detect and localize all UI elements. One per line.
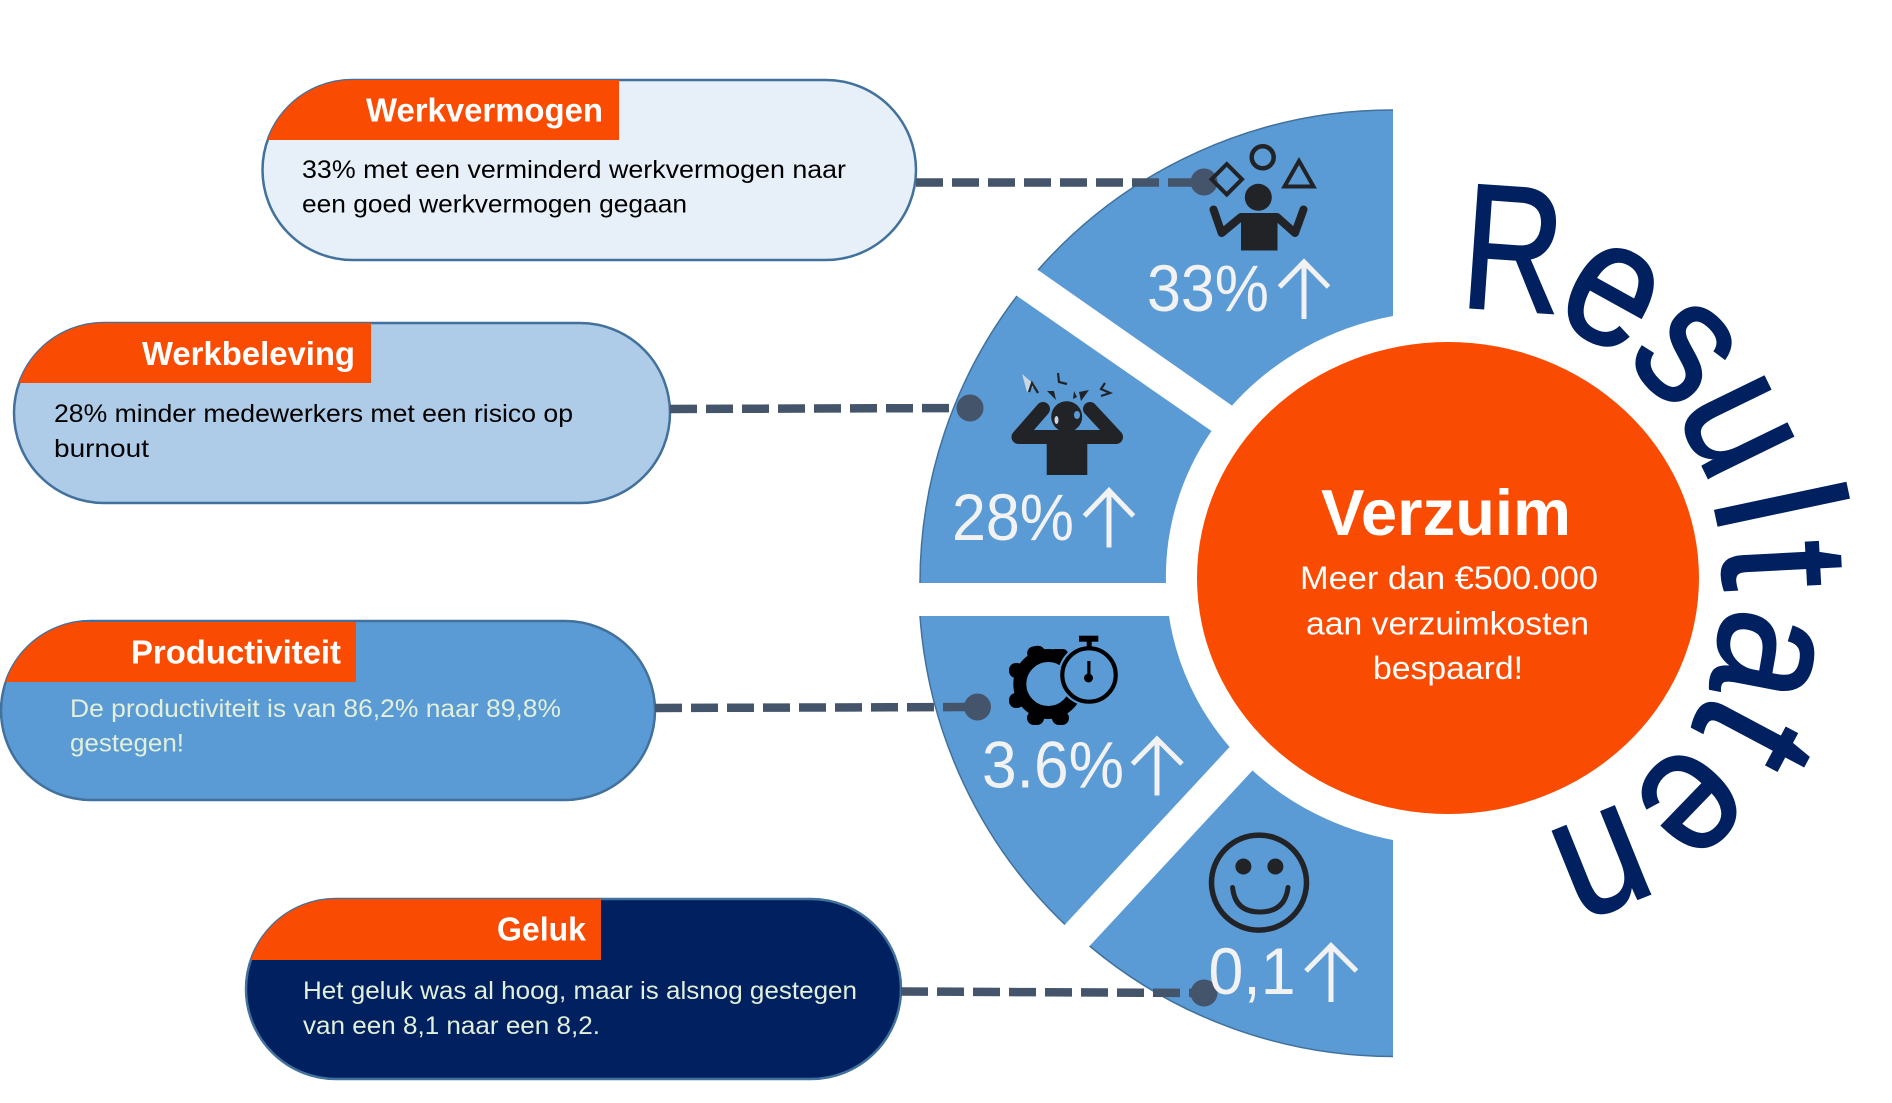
center text: bespaard!	[1373, 650, 1523, 686]
text: Werkbeleving: burnout	[54, 435, 149, 463]
text: Geluk: Het geluk was al hoog, maar is alsnog gestegen	[303, 977, 857, 1005]
curved title: Resultaten: e	[1531, 176, 1704, 393]
text: Werkvermogen	[302, 156, 846, 218]
connector: Werkvermogen	[916, 168, 1218, 196]
connector: Productiviteit	[655, 694, 991, 720]
connector: Werkbeleving	[670, 394, 984, 422]
curved title: Resultaten	[1456, 146, 1888, 985]
curved title: Resultaten: a	[1672, 596, 1885, 720]
curved title: Resultaten: l	[1674, 465, 1883, 545]
curved title: Resultaten: R	[1456, 146, 1570, 351]
pill: Geluk	[240, 899, 901, 1079]
text: Productiviteit: gestegen!	[70, 730, 184, 758]
heading: Productiviteit: Productiviteit	[131, 634, 341, 670]
ring segment: Werkbeleving	[920, 296, 1212, 583]
curved title: Resultaten: n	[1529, 767, 1685, 985]
curved title: Resultaten: t	[1656, 668, 1857, 805]
heading: Werkvermogen: Werkvermogen	[366, 92, 603, 128]
curved title: Resultaten: e	[1598, 711, 1802, 912]
stat: 0,1 up: 0,1	[1208, 934, 1296, 1008]
ring segment: Productiviteit	[920, 616, 1230, 924]
icon: gear with stopwatch	[1009, 636, 1120, 725]
center text: aan verzuimkosten	[1306, 606, 1589, 642]
ring segment: Geluk	[1090, 770, 1393, 1056]
text: Werkbeleving	[54, 400, 573, 463]
curved title: Resultaten: s	[1596, 245, 1793, 442]
icon: smiley	[1212, 835, 1306, 930]
text: Geluk: van een 8,1 naar een 8,2.	[303, 1012, 600, 1040]
curved title: Resultaten: u	[1641, 338, 1858, 504]
icon: juggling person	[1212, 146, 1314, 250]
stat: 33% up: 33%	[1147, 251, 1269, 325]
stat: 28% up: 28%	[952, 480, 1074, 554]
arrow up	[1084, 490, 1134, 548]
center heading: Verzuim	[1321, 476, 1571, 549]
text: Werkbeleving: 28% minder medewerkers met een risico op	[54, 400, 573, 428]
center text	[1300, 560, 1598, 686]
arrow up	[1280, 262, 1328, 319]
ring segment: Werkvermogen	[1038, 110, 1393, 406]
text: Geluk	[303, 977, 857, 1040]
heading: Geluk: Geluk	[497, 910, 587, 948]
curved title: Resultaten: t	[1682, 536, 1888, 594]
pill: Werkvermogen	[255, 79, 916, 260]
center text: Meer dan €500.000	[1300, 560, 1598, 596]
connector: Geluk	[901, 980, 1218, 1006]
stat: 0,1 up	[1208, 934, 1356, 1008]
arrow up	[1306, 946, 1356, 1002]
text: Werkvermogen: 33% met een verminderd werkvermogen naar	[302, 156, 846, 184]
text: Werkvermogen: een goed werkvermogen gegaan	[302, 190, 687, 218]
center circle: Verzuim	[1197, 342, 1699, 814]
icon: stressed person	[1018, 373, 1116, 475]
stat: 3.6% up: 3.6%	[982, 728, 1124, 802]
pill: Productiviteit	[0, 621, 655, 800]
text: Productiviteit	[70, 695, 561, 758]
text: Productiviteit: De productiviteit is van 86,2% naar 89,8%	[70, 695, 561, 723]
heading: Werkbeleving: Werkbeleving	[142, 335, 355, 372]
arrow up	[1132, 739, 1182, 796]
pill: Werkbeleving	[5, 322, 670, 503]
